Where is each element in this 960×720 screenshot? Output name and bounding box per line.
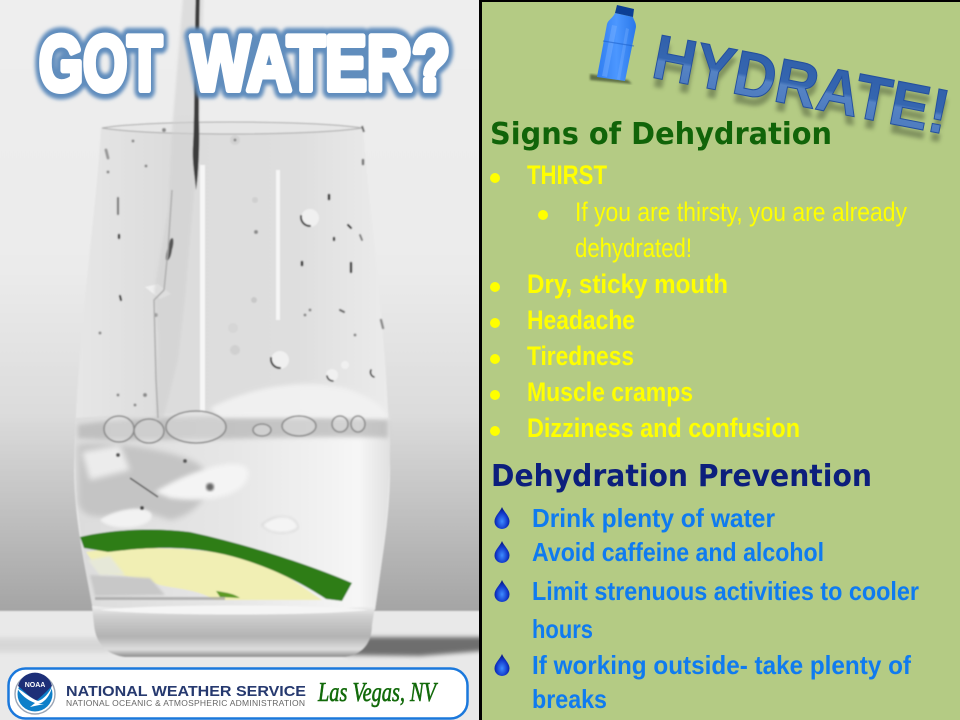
- title: GOT WATER?: GOT: [39, 19, 162, 107]
- icon: water bottle: [590, 5, 636, 84]
- panel: photo of water glass: [0, 0, 495, 720]
- icon: lime slice: [80, 530, 352, 601]
- panel: black divider: [479, 0, 960, 720]
- glass base: [92, 606, 375, 657]
- icon: glass body: [74, 122, 390, 657]
- bubbles: [104, 411, 365, 443]
- list: dehydration prevention: Limit strenuous activities to cooler: [532, 576, 919, 606]
- footer: National Weather Service banner: [8, 668, 468, 718]
- panel: right column background: [482, 2, 960, 720]
- list: dehydration prevention: hours: [532, 614, 593, 644]
- list: dehydration prevention: If working outside- take plenty of: [532, 650, 911, 680]
- title: GOT WATER?: WATER?: [191, 19, 450, 107]
- list: signs of dehydration: Headache: [527, 305, 635, 335]
- footer: National Weather Service banner: Las Vegas, NV: [317, 677, 439, 707]
- list: dehydration prevention: Avoid caffeine and alcohol: [532, 537, 824, 567]
- footer: National Weather Service banner: NATIONAL OCEANIC & ATMOSPHERIC ADMINISTRATION: [66, 698, 305, 708]
- icon: NOAA logo: NOAA: [25, 682, 45, 689]
- list: signs of dehydration: THIRST: [527, 160, 607, 190]
- table surface: [0, 611, 495, 720]
- icon: pouring water stream: [154, 0, 204, 420]
- list: dehydration prevention: [494, 503, 919, 714]
- title: GOT WATER?: WATER?: [191, 19, 450, 107]
- droplets: [98, 128, 383, 406]
- list: signs of dehydration: dehydrated!: [575, 233, 692, 263]
- list: signs of dehydration: [490, 160, 907, 443]
- heading: Signs of Dehydration: Signs of Dehydration: [490, 117, 832, 152]
- icon: NOAA logo: [15, 673, 55, 714]
- list: dehydration prevention: breaks: [532, 684, 607, 714]
- heading: Dehydration Prevention: Dehydration Prevention: [491, 459, 872, 494]
- water region: [75, 412, 390, 610]
- list: signs of dehydration: Dry, sticky mouth: [527, 269, 728, 299]
- list: signs of dehydration: Muscle cramps: [527, 377, 693, 407]
- title: GOT WATER?: [39, 19, 450, 107]
- title: GOT WATER?: GOT: [39, 19, 162, 107]
- list: signs of dehydration: Dizziness and confusion: [527, 413, 800, 443]
- list: signs of dehydration: Tiredness: [527, 341, 634, 371]
- footer: National Weather Service banner: NATIONAL WEATHER SERVICE: [66, 683, 306, 700]
- list: signs of dehydration: If you are thirsty, you are already: [575, 197, 907, 227]
- list: dehydration prevention: Drink plenty of water: [532, 503, 775, 533]
